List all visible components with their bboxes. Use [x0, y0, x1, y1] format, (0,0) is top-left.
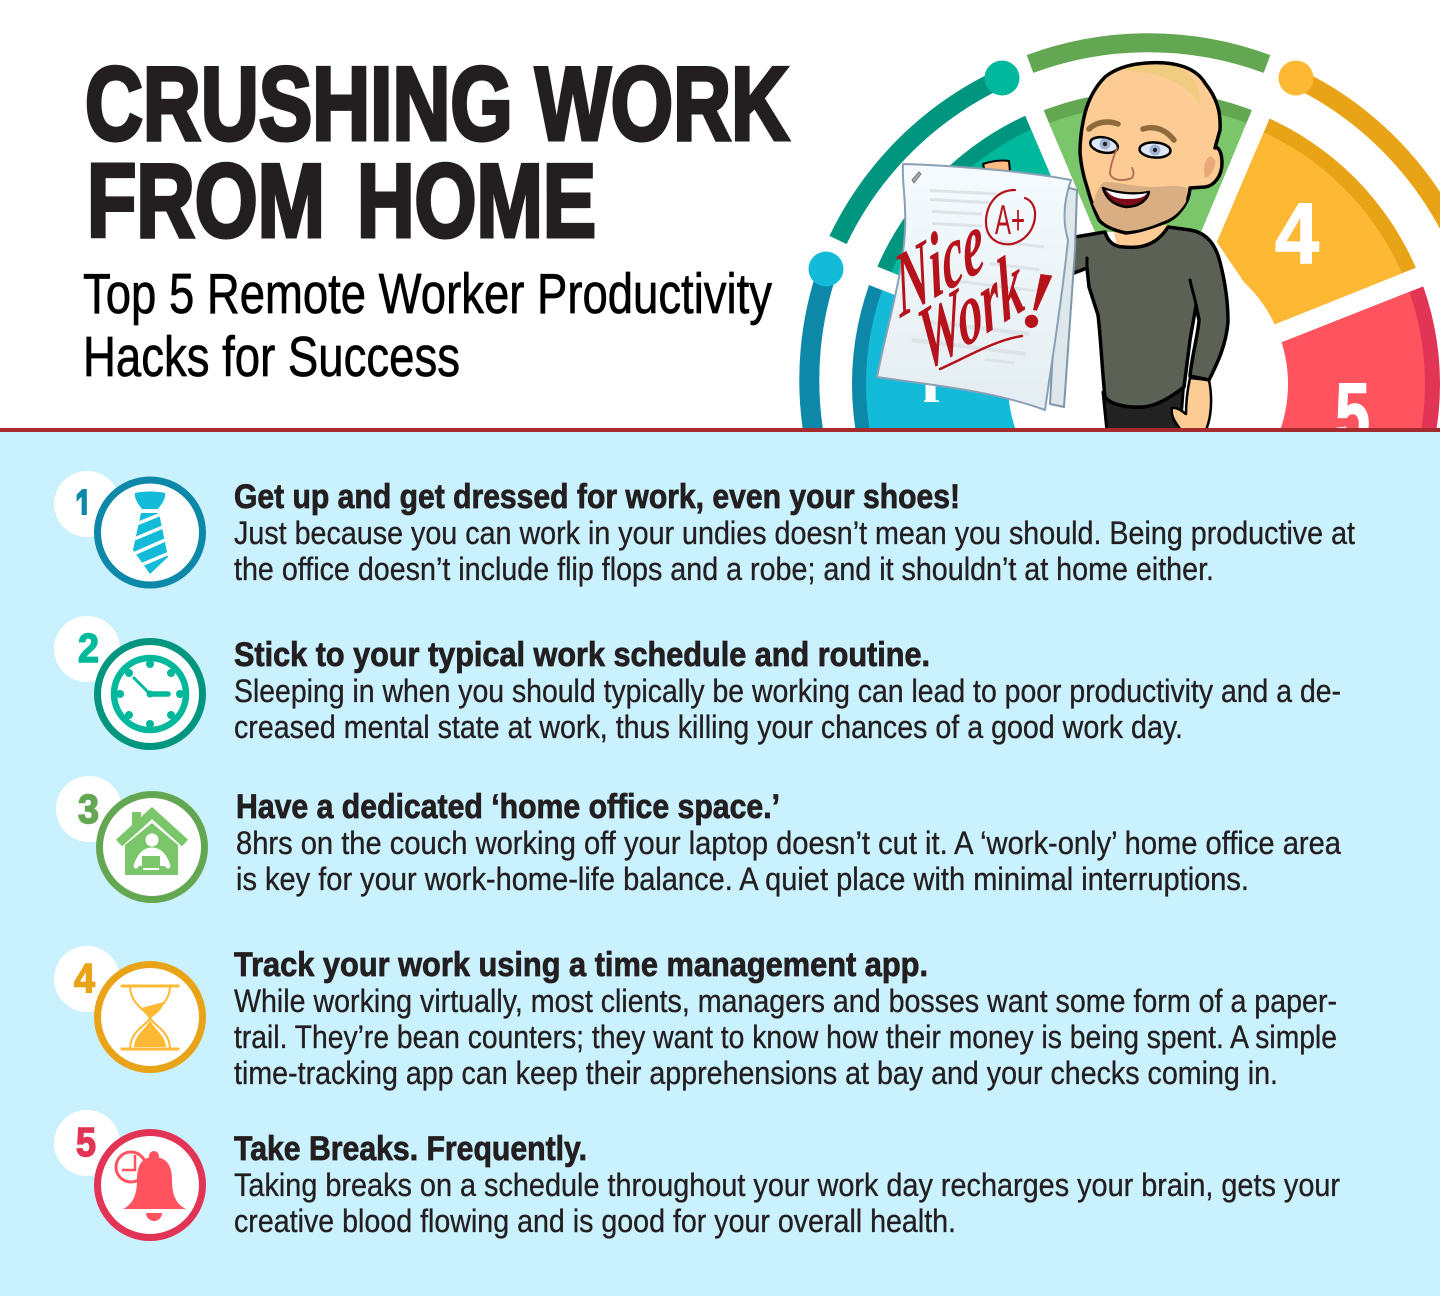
left hand: [1172, 378, 1211, 432]
tip 1 text: [234, 478, 1355, 587]
sector number 5: 5: [1335, 366, 1370, 462]
tip 5 text: creative blood flowing and is good for your overall health.: [234, 1203, 956, 1239]
badge 1: 1: [75, 481, 92, 534]
tip 5 text: Take Breaks. Frequently.: [234, 1130, 587, 1168]
tip 3 text: Have a dedicated ‘home office space.’: [236, 788, 780, 826]
divider bar: [0, 428, 1440, 432]
handwritten Work: Work: [911, 232, 1030, 391]
sector 4: [1217, 118, 1416, 324]
hair: [1122, 65, 1200, 104]
badge 4: [54, 946, 120, 1012]
back pages: [1050, 186, 1077, 407]
tip 3 text: [236, 788, 1341, 897]
badge 3: [56, 776, 122, 842]
tip 4 text: While working virtually, most clients, managers and bosses want some form of a paper-: [234, 983, 1337, 1019]
trousers: [1102, 388, 1185, 428]
title: HOME: [357, 144, 596, 260]
icon: clock: [98, 642, 202, 746]
sector number 4: 4: [1275, 186, 1319, 282]
neck: [1114, 225, 1168, 246]
illustration: cartoon man holding paper: [877, 63, 1228, 432]
badge 3: 3: [78, 786, 99, 832]
tip 3: [56, 776, 1341, 900]
title: [85, 46, 789, 260]
tip 2: [54, 616, 1341, 746]
ring segment 3: [1030, 43, 1267, 64]
tip 5 text: Taking breaks on a schedule throughout your work day recharges your brain, gets your: [234, 1167, 1340, 1203]
icon: hourglass: [98, 964, 202, 1070]
subtitle: Hacks for Success: [83, 325, 460, 389]
handwritten exclamation mark: !: [1015, 253, 1060, 347]
ring segment 4: [1278, 60, 1440, 229]
head: [1080, 63, 1222, 233]
ear detail: [1204, 156, 1215, 178]
grade circle: [986, 190, 1035, 244]
eyes: [1089, 135, 1171, 159]
icon: necktie: [98, 480, 202, 585]
grade circle: A+: [995, 196, 1025, 243]
tip 5 text: [234, 1130, 1340, 1239]
sector 5: [1280, 286, 1440, 428]
tip 4 text: Track your work using a time management app.: [234, 946, 928, 984]
chart: five-segment wheel: [799, 33, 1440, 428]
mouth: [1103, 188, 1149, 207]
sector 2: [878, 116, 1051, 275]
paperclip: [912, 172, 921, 183]
tip 1 text: Get up and get dressed for work, even your shoes!: [234, 478, 960, 516]
handwritten Nice: Nice: [888, 188, 989, 338]
tip 5: [54, 1110, 1340, 1239]
teeth: [1106, 190, 1147, 199]
ring segment 2: [838, 60, 1020, 240]
tip 4 text: [234, 946, 1337, 1091]
icon: home office: [100, 794, 204, 900]
title: CRUSHING WORK: [85, 46, 789, 162]
nose: [1110, 148, 1134, 180]
tip 1 text: the office doesn’t include flip flops and a robe; and it shouldn’t at home either.: [234, 551, 1214, 587]
panel: header: [83, 46, 789, 389]
tip 2 text: creased mental state at work, thus killing your chances of a good work day.: [234, 709, 1183, 745]
tip 4 text: time-tracking app can keep their apprehensions at bay and your checks coming in.: [234, 1055, 1278, 1091]
shirt: [1069, 227, 1228, 407]
subtitle: Top 5 Remote Worker Productivity: [83, 262, 772, 326]
sector 1: [852, 285, 1016, 428]
badge 4: 4: [74, 955, 95, 1001]
ring segment 1: [808, 252, 844, 430]
tip 2 text: [234, 636, 1341, 745]
badge 5: 5: [76, 1119, 96, 1165]
badge 2: 2: [78, 625, 99, 671]
paper lines: [912, 189, 1045, 365]
icon: bell and clock: [98, 1132, 202, 1238]
beard: [1093, 182, 1187, 231]
subtitle: [83, 262, 772, 389]
sector number 1: 1: [911, 333, 947, 429]
sector 3: [1044, 97, 1252, 232]
title: FROM: [87, 144, 325, 260]
top hand: [983, 161, 1010, 172]
tip 1: [54, 471, 1355, 587]
eyebrows: [1089, 122, 1174, 140]
tip 3 text: is key for your work-home-life balance. A quiet place with minimal interruptions.: [236, 861, 1249, 897]
badge 1: [54, 471, 120, 537]
badge 5: [54, 1110, 120, 1176]
tip 3 text: 8hrs on the couch working off your laptop doesn’t cut it. A ‘work-only’ home office area: [236, 825, 1341, 861]
sleeve fold: [1087, 258, 1199, 320]
underline swash: [940, 336, 1022, 369]
badge 2: [54, 616, 120, 682]
tip 4: [54, 946, 1337, 1091]
tip 2 text: Stick to your typical work schedule and routine.: [234, 636, 930, 674]
paper: [877, 164, 1071, 410]
panel: tips background: [0, 432, 1440, 1296]
